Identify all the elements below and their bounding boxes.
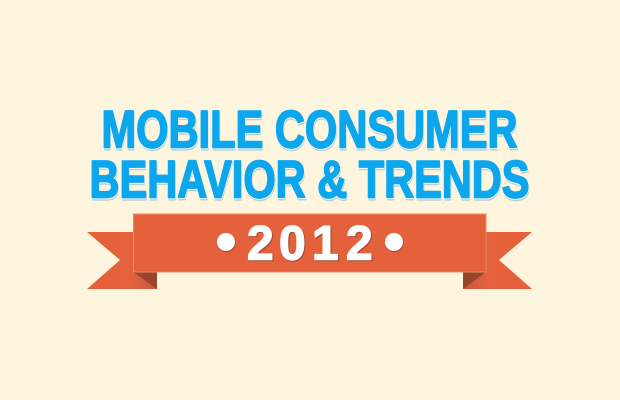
year label: 2012 (248, 218, 374, 272)
left ribbon tail (87, 232, 157, 289)
title line 1: MOBILE CONSUMER (102, 101, 518, 160)
right ribbon tail (463, 232, 532, 289)
year label (217, 218, 404, 272)
left ribbon fold (133, 272, 157, 289)
ribbon main band (134, 214, 486, 272)
year label: 2012 (247, 218, 373, 270)
title line 1: MOBILE CONSUMER (102, 100, 518, 160)
title (90, 100, 530, 212)
right bullet (385, 233, 404, 252)
title line 1: MOBILE CONSUMER (102, 102, 518, 162)
ribbon banner (87, 214, 532, 289)
right ribbon fold (463, 272, 486, 289)
left bullet (217, 233, 236, 252)
